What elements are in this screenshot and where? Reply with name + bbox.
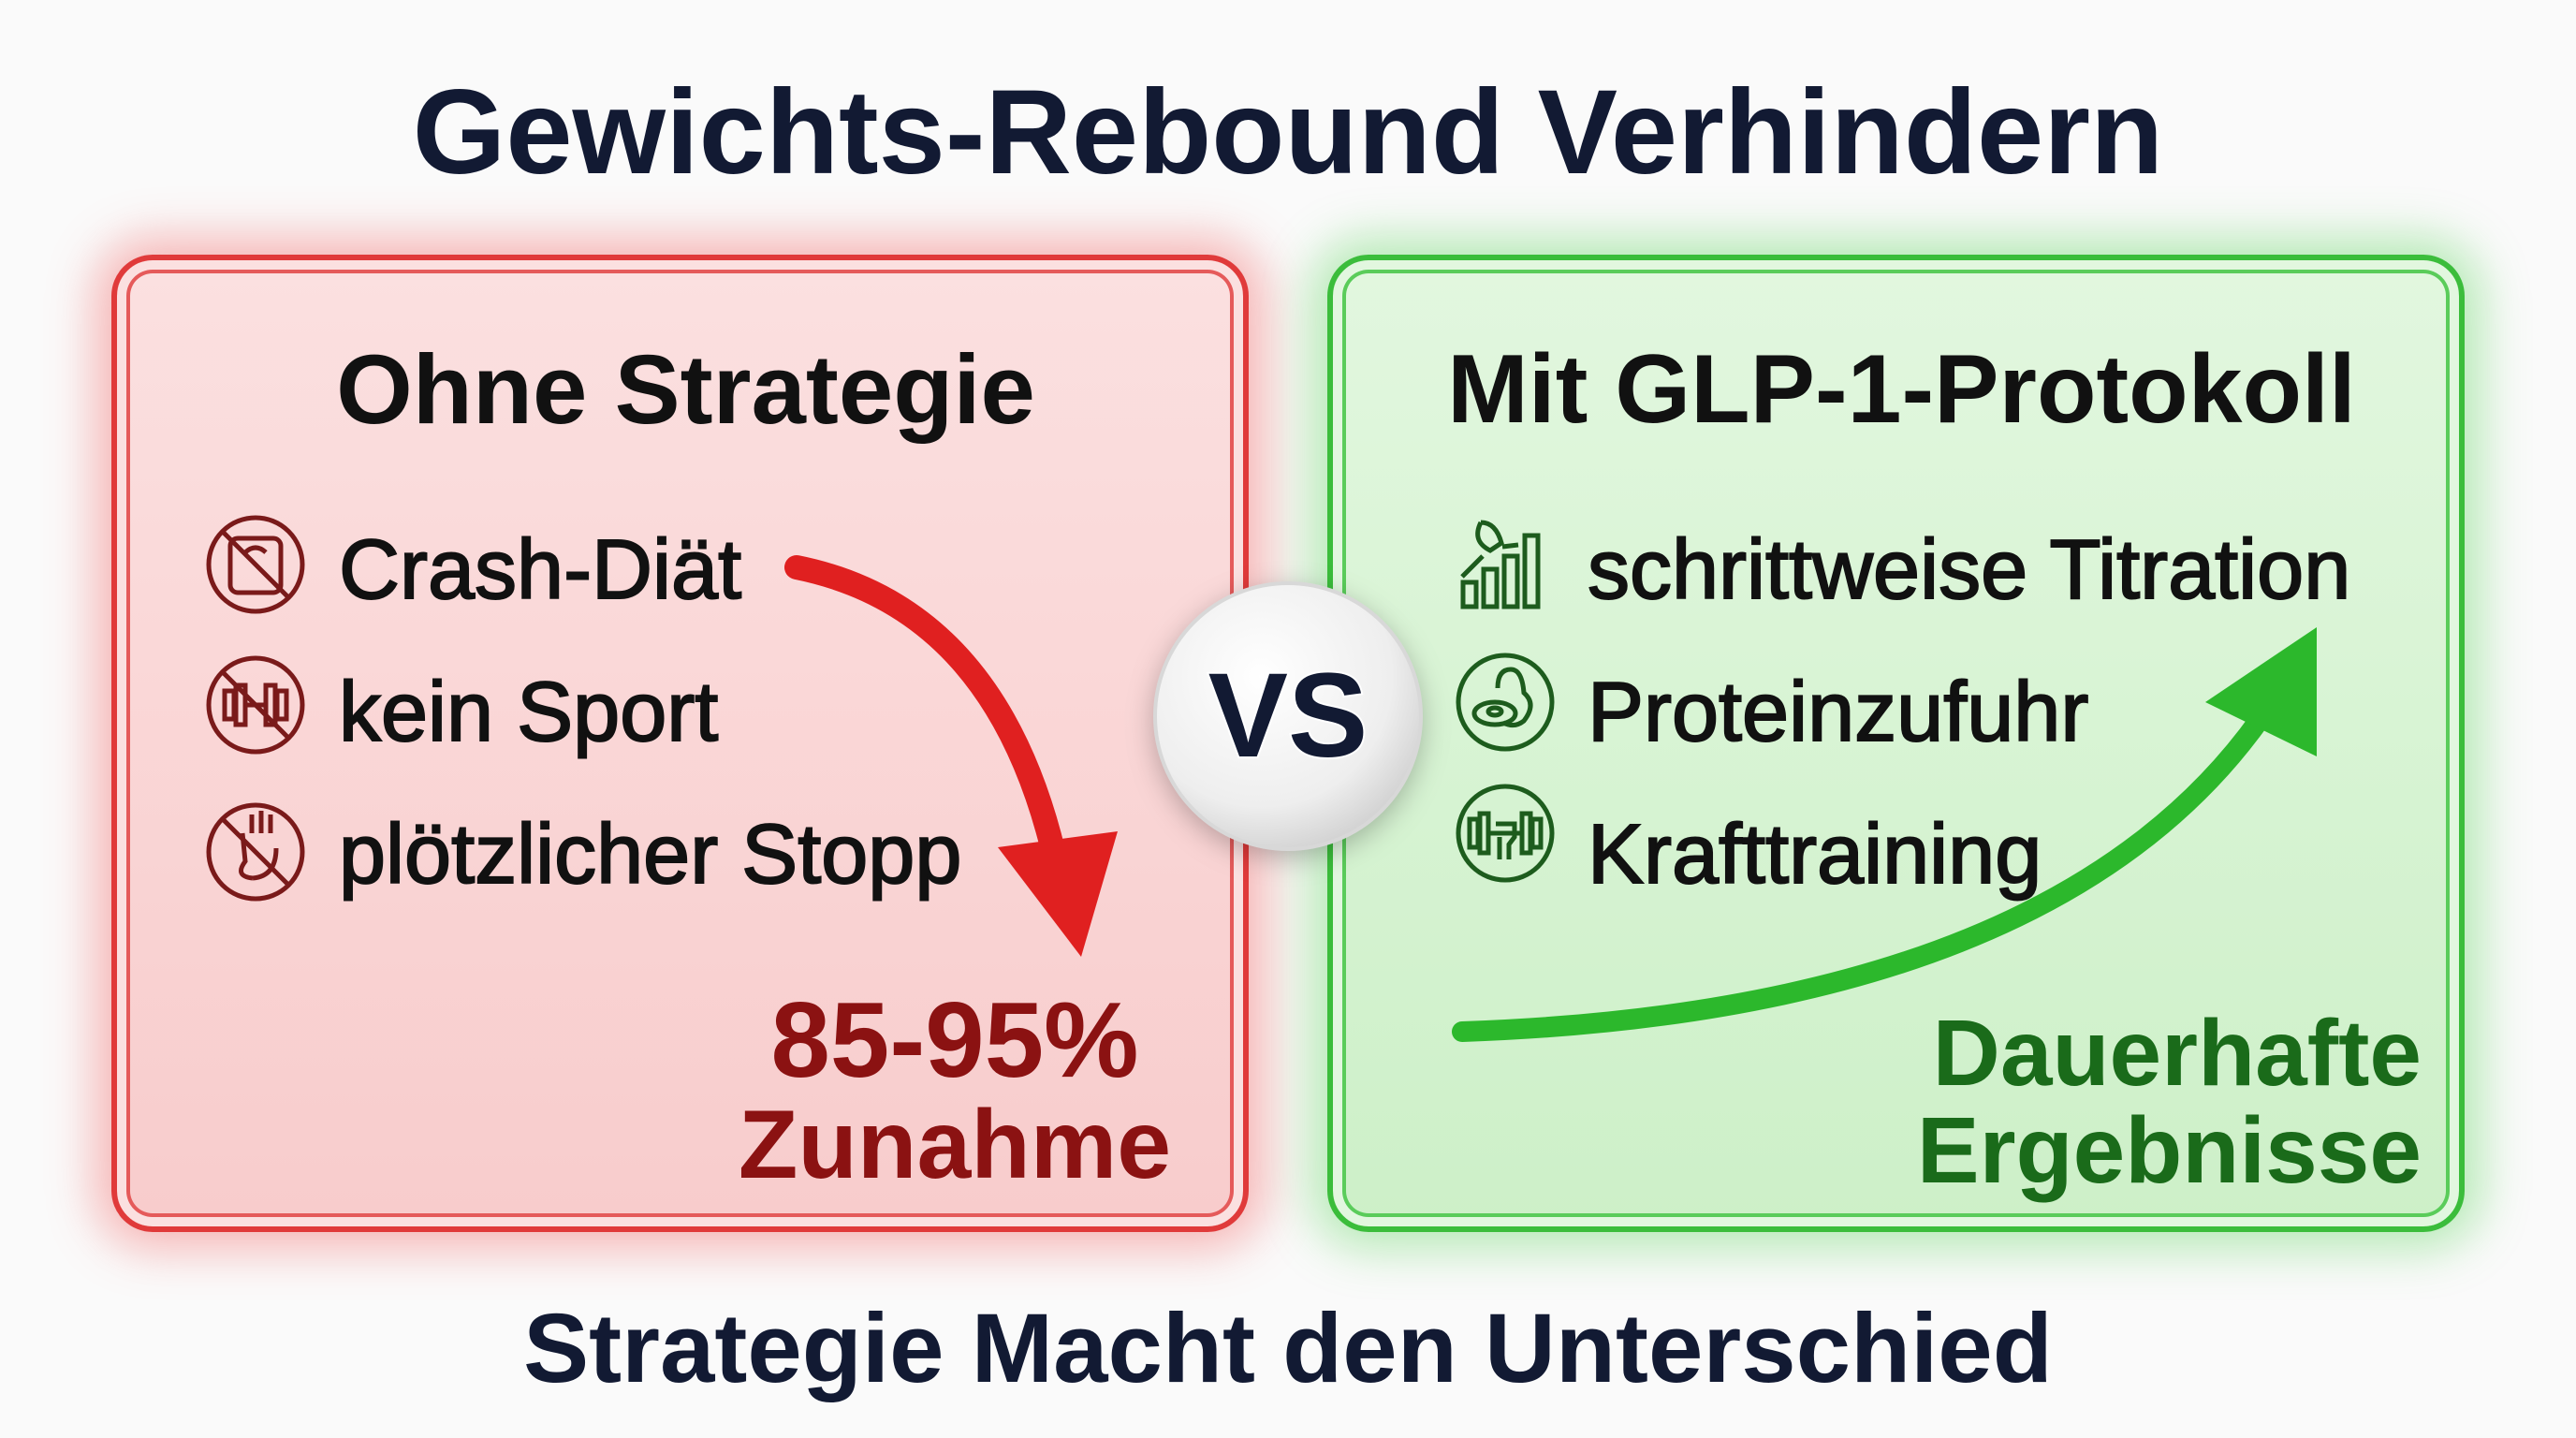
arrow: green up	[1462, 627, 2317, 1032]
icon: no scale	[209, 518, 302, 611]
icon: titration bars	[1462, 522, 1538, 607]
result: dauerhafte ergebnisse: Dauerhafte	[1933, 1001, 2422, 1106]
result: 85-95% zunahme: 85-95%	[771, 981, 1138, 1100]
result: dauerhafte ergebnisse: Ergebnisse	[1917, 1098, 2422, 1203]
item: proteinzufuhr: Proteinzufuhr	[1588, 666, 2088, 759]
panel: ohne strategie	[111, 255, 1249, 1232]
item: kein sport: kein Sport	[339, 666, 718, 759]
vs badge: VS	[1208, 649, 1368, 783]
item: ploetzlicher stopp: plötzlicher Stopp	[339, 808, 961, 902]
heading: mit glp-1-protokoll: Mit GLP-1-Protokoll	[1447, 335, 2356, 444]
icon: protein	[1458, 655, 1552, 749]
item: crash-diaet: Crash-Diät	[339, 523, 741, 617]
item: schrittweise titration: schrittweise Titration	[1588, 523, 2350, 617]
result: dauerhafte ergebnisse	[1917, 1001, 2422, 1203]
item: krafttraining: Krafttraining	[1588, 808, 2042, 902]
title: Gewichts-Rebound Verhindern	[413, 66, 2163, 199]
heading: ohne strategie: Ohne Strategie	[336, 335, 1035, 445]
icon: no dumbbell	[209, 658, 302, 752]
arrow: red down	[797, 567, 1118, 957]
icon: no hand	[209, 805, 302, 899]
vs badge	[1155, 583, 1421, 849]
footer text: Strategie Macht den Unterschied	[523, 1294, 2053, 1403]
panel: mit glp-1-protokoll	[1327, 255, 2465, 1232]
result: 85-95% zunahme: Zunahme	[739, 1091, 1171, 1199]
icon: strength training	[1458, 786, 1552, 880]
result: 85-95% zunahme	[739, 981, 1171, 1199]
